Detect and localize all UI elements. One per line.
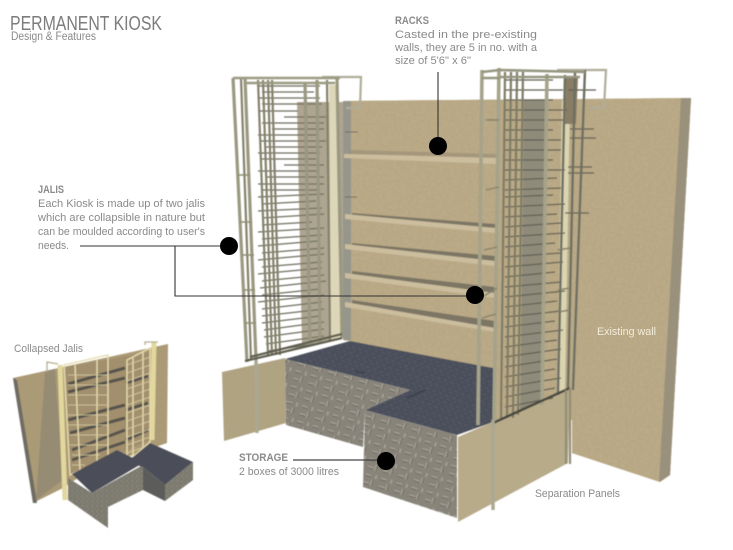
jalis leader lines and dots [80,237,484,304]
inset: collapsed jalis illustration [13,342,193,528]
subtitle: Design & Features [11,31,96,43]
existing wall [343,98,691,482]
title block [10,13,163,43]
existing wall label: Existing wall [597,326,656,338]
racks label: size of 5'6" x 6" [395,55,471,67]
storage label: 2 boxes of 3000 litres [239,466,339,478]
storage leader and dot [293,452,395,470]
jalis label: can be moulded according to user's [38,226,205,238]
separation panels [222,358,570,522]
jalis label: JALIS [38,184,64,196]
separation panels label: Separation Panels [535,488,620,500]
left jali [233,77,361,433]
right jali [478,68,606,510]
jalis label: needs. [38,240,69,252]
inset storage boxes [72,450,143,493]
racks label [394,15,538,67]
jalis label: which are collapsible in nature but [37,212,205,224]
main kiosk illustration [222,68,691,522]
box fronts [285,359,410,447]
box tops [285,341,493,435]
jalis label: Each Kiosk is made up of two jalis [38,198,205,210]
title: PERMANENT KIOSK [10,13,163,35]
inset posts [60,342,154,500]
racks [344,150,497,332]
storage label: STORAGE [239,452,288,464]
inset wall [13,344,168,503]
storage label [239,452,339,478]
racks label: Casted in the pre-existing [395,29,537,41]
racks label: RACKS [395,15,429,27]
racks label: walls, they are 5 in no. with a [394,42,538,54]
collapsed jalis label: Collapsed Jalis [14,343,83,355]
racks leader and dot [429,72,447,155]
jalis label [37,184,205,252]
inset collapsed jali [64,348,150,475]
storage boxes [285,341,493,518]
